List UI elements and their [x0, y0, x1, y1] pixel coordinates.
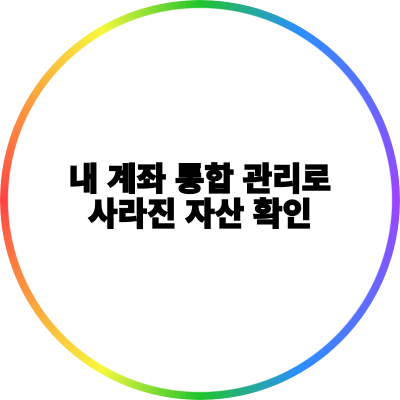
title: 내 계좌 통합 관리로 [69, 161, 331, 197]
title [69, 161, 331, 232]
title: 사라진 자산 확인 [88, 196, 312, 232]
